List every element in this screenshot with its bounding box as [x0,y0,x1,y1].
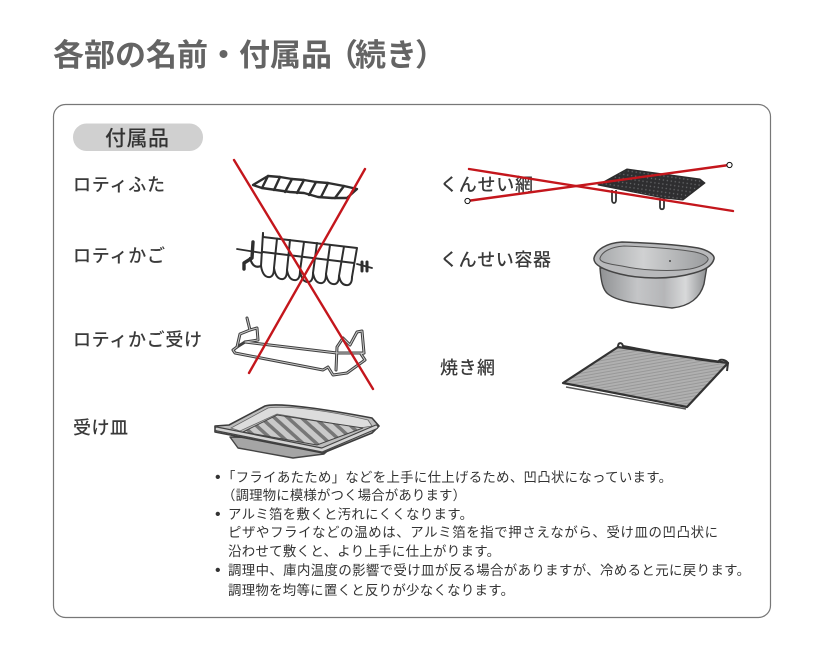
icon: drip tray [215,405,379,458]
title: 各部の名前・付属品 [53,38,332,73]
notes text block: （調理物に模様がつく場合があります） [222,488,466,503]
label: grill net: 焼き網 [440,358,495,378]
notes text block: • [215,506,221,523]
notes text block: 沿わせて敷くと、より上手に仕上がります。 [228,543,500,559]
icon: smoking net [598,169,705,209]
label: drip tray: 受け皿 [73,418,128,438]
title: ） [415,38,446,73]
label: smoking container: くんせい容器 [440,250,551,270]
notes text block: • [215,562,221,579]
label: rotisserie lid: ロティふた [73,175,165,195]
strike-through: left column [234,160,373,389]
notes text block: アルミ箔を敷くと汚れにくくなります。 [228,506,473,522]
label: rotisserie basket: ロティかご [73,246,165,266]
label: smoking net: くんせい網 [440,175,533,195]
icon: smoking container [594,242,714,308]
icon: rotisserie lid [253,176,357,198]
heading pill: accessories [73,124,203,151]
title: 続き [355,38,417,73]
title: （ [327,38,358,73]
notes text block: 調理中、庫内温度の影響で受け皿が反る場合がありますが、冷めると元に戻ります。 [228,563,750,578]
notes text block [215,469,750,598]
notes text block: • [215,469,221,486]
notes text block: ピザやフライなどの温めは、アルミ箔を指で押さえながら、受け皿の凹凸状に [228,525,718,540]
icon: rotisserie basket holder [233,318,365,375]
heading pill: accessories: 付属品 [105,128,169,150]
panel: accessories [54,104,770,618]
strike-through: smoking net [465,162,733,211]
label: rotisserie basket holder: ロティかご受け [73,330,202,350]
icon: rotisserie basket [237,233,372,285]
notes text block: 「フライあたため」などを上手に仕上げるため、凹凸状になっています。 [222,470,672,485]
icon: grill net [563,343,728,409]
notes text block: 調理物を均等に置くと反りが少なくなります。 [228,582,514,598]
